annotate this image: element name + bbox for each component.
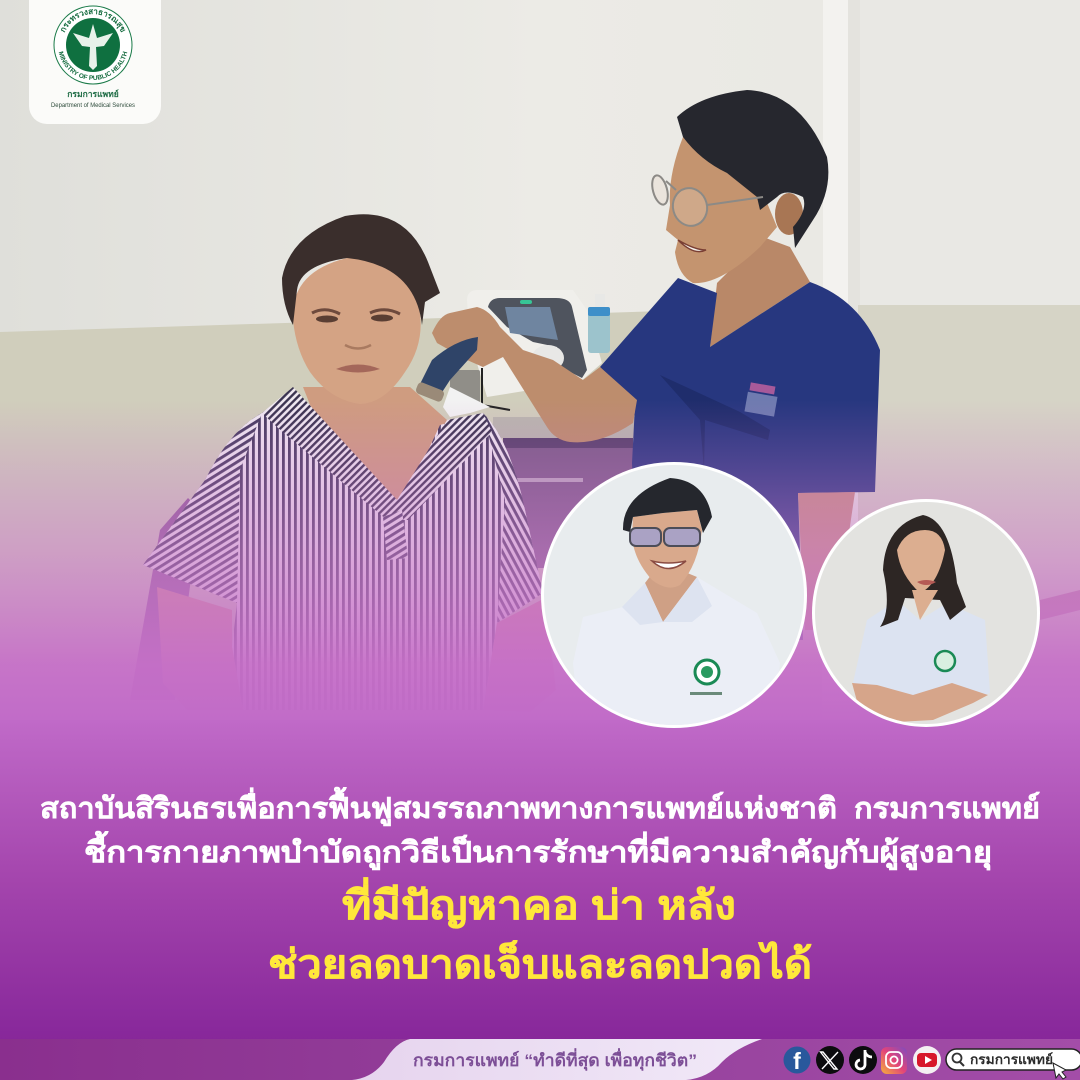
blouse right sleeve xyxy=(483,413,543,623)
therapist glasses xyxy=(649,174,763,230)
icon: X xyxy=(816,1046,844,1074)
patient neck and chest xyxy=(303,387,447,500)
purple lower panel xyxy=(0,720,1080,1040)
gradient fade over photo xyxy=(0,400,1080,730)
icon: facebook xyxy=(784,1046,810,1074)
icon: instagram xyxy=(881,1047,907,1074)
ministry seal xyxy=(54,6,132,84)
name badge xyxy=(744,382,777,417)
blouse placket xyxy=(383,510,408,560)
blouse left sleeve xyxy=(143,413,262,603)
footer strip xyxy=(0,1039,1080,1080)
logo caption xyxy=(51,89,135,109)
headline: yellow lines: ช่วยลดบาดเจ็บและลดปวดได้ xyxy=(268,939,812,987)
headline: yellow lines: ที่มีปัญหาคอ บ่า หลัง xyxy=(342,877,736,929)
logo card xyxy=(29,0,161,124)
logo caption: กรมการแพทย์ xyxy=(67,89,119,99)
footer slogan banner xyxy=(352,1039,762,1080)
icon: tiktok xyxy=(849,1046,877,1074)
headline: yellow lines xyxy=(268,877,812,987)
ministry seal: MINISTRY OF PUBLIC HEALTH xyxy=(58,51,128,80)
footer slogan banner: กรมการแพทย์ “ทำดีที่สุด เพื่อทุกชีวิต” xyxy=(413,1048,697,1071)
logo caption: Department of Medical Services xyxy=(51,103,135,109)
photo: therapist xyxy=(432,90,880,640)
icon: youtube xyxy=(913,1046,941,1074)
search pill xyxy=(946,1049,1080,1079)
portrait: male doctor xyxy=(540,460,810,730)
blouse collar xyxy=(262,387,492,520)
headline: white lines: ชี้การกายภาพบำบัดถูกวิธีเป็นการรักษาที่มีความสำคัญกับผู้สูงอายุ xyxy=(84,830,992,870)
patient head xyxy=(293,258,421,404)
ministry seal: กระทรวงสาธารณสุข xyxy=(61,9,126,32)
search pill: กรมการแพทย์ xyxy=(970,1052,1053,1067)
photo: ultrasound probe xyxy=(415,337,478,403)
headline: white lines xyxy=(40,786,1040,870)
headline: white lines: สถาบันสิรินธรเพื่อการฟื้นฟูสมรรถภาพทางการแพทย์แห่งชาติ กรมการแพทย์ xyxy=(40,786,1040,826)
portrait: female doctor xyxy=(810,499,1042,732)
blouse body xyxy=(143,395,543,710)
photo: patient xyxy=(130,214,556,712)
patient hair xyxy=(282,214,440,325)
icon: cursor xyxy=(1053,1063,1066,1079)
photo: treatment machine and cart xyxy=(450,290,635,568)
therapist arm and hand xyxy=(432,307,637,442)
icon: facebook: f xyxy=(793,1048,801,1074)
